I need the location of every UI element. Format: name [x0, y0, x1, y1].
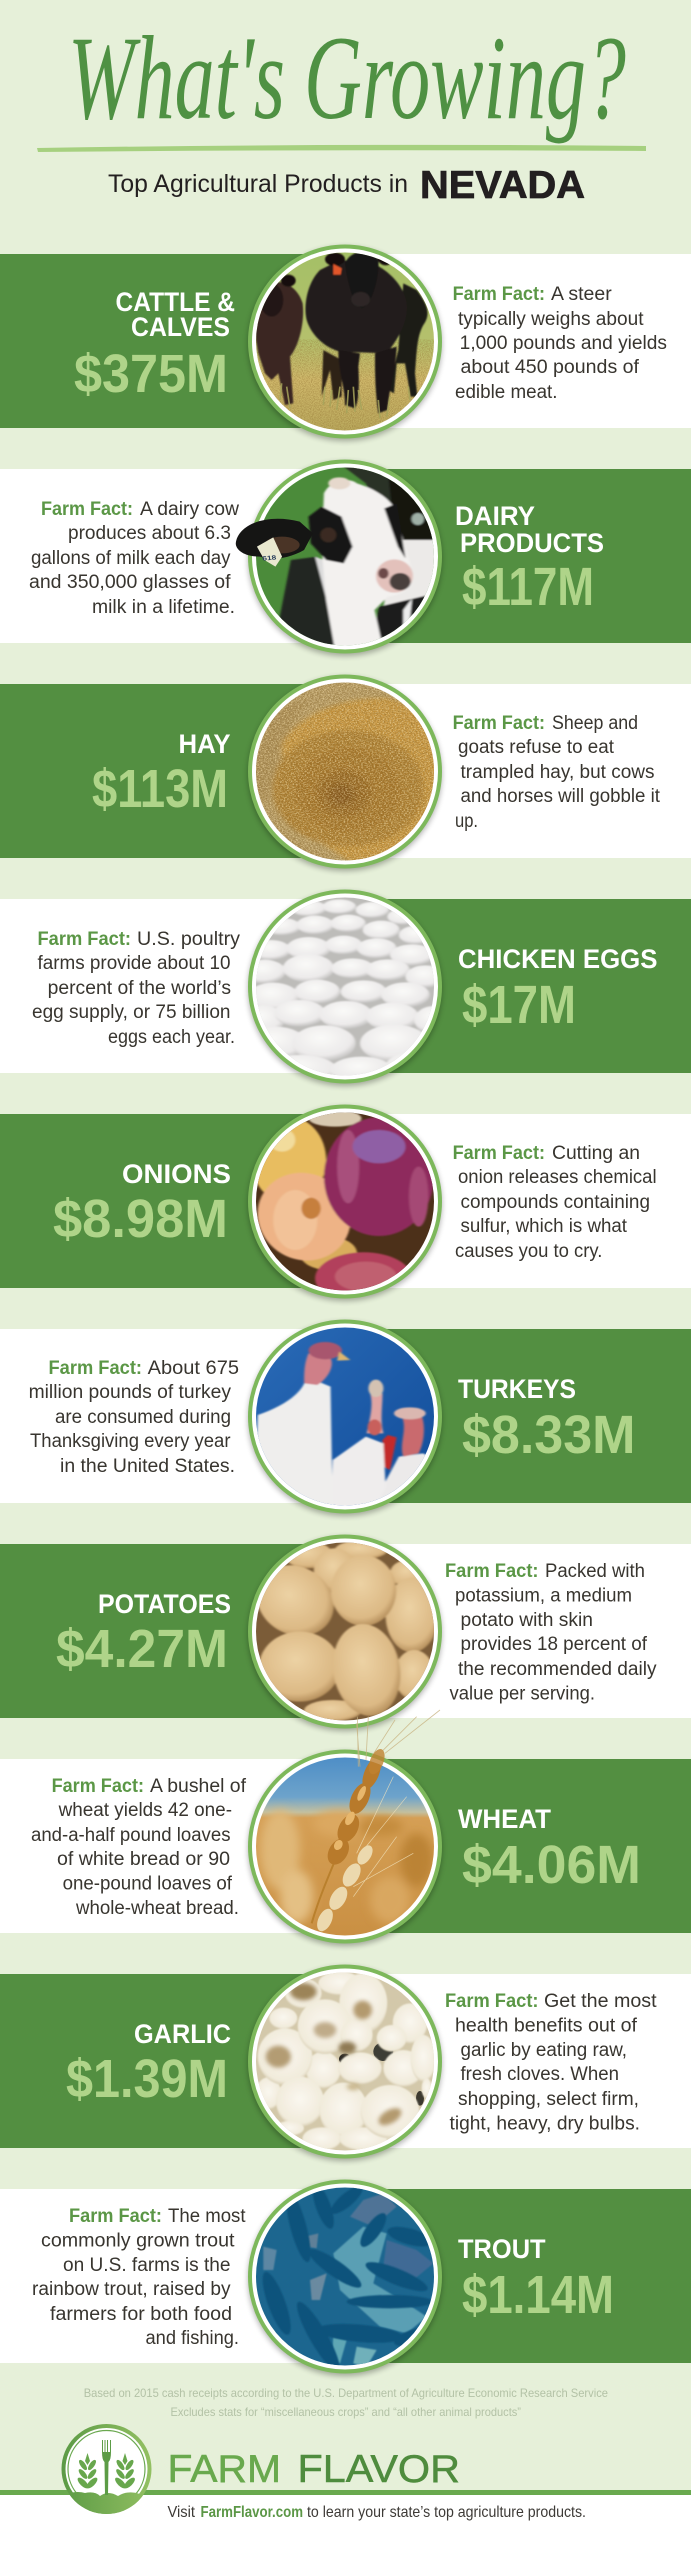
logo wheat stalks: [76, 2453, 137, 2490]
farm fact text: of white bread or 90: [57, 1849, 230, 1870]
farm fact text: [32, 2206, 246, 2349]
farm fact text: rainbow trout, raised by: [32, 2279, 231, 2300]
wordmark: farm flavor: FLAVOR: [298, 2448, 460, 2491]
heading: dairy products: PRODUCTS: [460, 528, 604, 558]
farm fact text: produces about 6.3: [68, 523, 231, 544]
source notes: Based on 2015 cash receipts according to the U.S. Department of Agriculture Economic Research Service: [84, 2386, 608, 2400]
photo: dairy cow: [236, 460, 450, 656]
farm fact text: causes you to cry.: [455, 1241, 602, 1262]
value: $1.14M: $1.14M: [462, 2265, 614, 2325]
farm fact text: and-a-half pound loaves: [31, 1825, 230, 1846]
farm fact text: [453, 713, 661, 832]
photo: onions: [247, 1103, 450, 1304]
farm fact text: eggs each year.: [108, 1027, 235, 1048]
farm fact text: Farm Fact:: [48, 1358, 142, 1379]
farm fact text: [29, 499, 239, 618]
heading: wheat: WHEAT: [458, 1804, 551, 1834]
farm fact text: million pounds of turkey: [29, 1382, 231, 1403]
panel: potatoes: [0, 1533, 691, 1731]
farm fact text: farms provide about 10: [38, 953, 230, 974]
heading: potatoes: POTATOES: [98, 1589, 231, 1619]
farm fact text: Farm Fact:: [445, 1991, 538, 2012]
farm fact text: [31, 1776, 247, 1919]
farm fact text: Farm Fact:: [52, 1776, 144, 1797]
photo: garlic: [248, 1964, 442, 2161]
farm fact text: potato with skin: [460, 1610, 593, 1631]
farm fact text: and horses will gobble it: [460, 786, 661, 807]
value: $375M: $375M: [74, 344, 228, 404]
panel: hay: [0, 673, 691, 871]
farm fact text: are consumed during: [55, 1407, 231, 1428]
farm fact text: wheat yields 42 one-: [58, 1800, 232, 1821]
logo fork: [102, 2440, 111, 2495]
farm fact text: edible meat.: [455, 382, 558, 403]
heading: garlic: GARLIC: [134, 2019, 231, 2049]
farm fact text: in the United States.: [60, 1456, 235, 1477]
subtitle: [108, 164, 585, 207]
farm fact text: sulfur, which is what: [460, 1216, 628, 1237]
call to action: [168, 2504, 586, 2521]
farm fact text: on U.S. farms is the: [63, 2255, 230, 2276]
farm fact text: trampled hay, but cows: [460, 762, 654, 783]
farm fact text: Farm Fact:: [453, 713, 545, 734]
photo: turkeys: [247, 1320, 450, 1517]
farm fact text: potassium, a medium: [455, 1586, 632, 1606]
title: What's: [68, 11, 285, 144]
farm fact text: Cutting an: [552, 1143, 640, 1164]
farm fact text: milk in a lifetime.: [92, 597, 235, 618]
farm fact text: [453, 1143, 657, 1262]
farm fact text: commonly grown trout: [41, 2230, 235, 2252]
panel: onions: [0, 1103, 691, 1304]
photo: cattle: [248, 244, 442, 441]
farm fact text: fresh cloves. When: [460, 2064, 619, 2085]
farm fact text: provides 18 percent of: [460, 1634, 648, 1655]
photo: hay bale: [247, 673, 450, 871]
farm fact text: Farm Fact:: [38, 929, 131, 950]
farm fact text: health benefits out of: [455, 2016, 638, 2036]
farm fact text: A bushel of: [150, 1776, 247, 1797]
header: [37, 11, 646, 207]
farm fact text: Farm Fact:: [69, 2206, 162, 2227]
call to action: Visit: [168, 2504, 196, 2521]
subtitle: Top Agricultural Products in: [108, 170, 408, 198]
value: $1.39M: $1.39M: [66, 2049, 228, 2109]
footer: [0, 2424, 691, 2560]
heading: turkeys: TURKEYS: [458, 1374, 576, 1404]
farm fact text: gallons of milk each day: [31, 548, 231, 569]
heading: onions: ONIONS: [122, 1159, 231, 1189]
farm fact text: Thanksgiving every year: [30, 1431, 231, 1452]
heading: dairy products: DAIRY: [455, 501, 535, 531]
farm fact text: [29, 1358, 239, 1477]
farm fact text: A steer: [551, 284, 612, 305]
farm fact text: onion releases chemical: [458, 1167, 657, 1188]
farm fact text: Farm Fact:: [453, 1143, 545, 1164]
farm fact text: [445, 1561, 657, 1704]
heading: trout: TROUT: [458, 2234, 546, 2264]
farm fact text: about 450 pounds of: [460, 357, 640, 378]
source notes: Excludes stats for “miscellaneous crops” and “all other animal products”: [170, 2405, 521, 2419]
wheat awns: [357, 1710, 440, 1777]
wordmark: farm flavor: [168, 2448, 460, 2491]
heading: cattle and calves: CATTLE &: [116, 287, 235, 317]
panel: chicken eggs: [0, 890, 691, 1086]
panel: wheat: [0, 1710, 691, 1946]
farm fact text: typically weighs about: [458, 309, 644, 330]
call to action: to learn your state’s top agriculture products.: [307, 2504, 586, 2521]
farm fact text: Farm Fact:: [445, 1561, 538, 1582]
heading: cattle and calves: CALVES: [131, 312, 230, 342]
farm fact text: compounds containing: [460, 1192, 650, 1213]
photo: eggs: [240, 890, 454, 1086]
farm fact text: percent of the world’s: [48, 978, 231, 999]
farm fact text: Farm Fact:: [453, 284, 545, 305]
farm fact text: garlic by eating raw,: [460, 2040, 627, 2061]
wordmark: farm flavor: FARM: [168, 2448, 281, 2491]
farm fact text: one-pound loaves of: [63, 1874, 233, 1894]
farm fact text: Packed with: [545, 1561, 645, 1582]
value: $4.06M: $4.06M: [462, 1835, 641, 1895]
panel: turkeys: [0, 1320, 691, 1517]
value: $113M: $113M: [92, 759, 228, 819]
panel: cattle and calves: [0, 244, 691, 441]
value: $8.98M: $8.98M: [53, 1189, 228, 1249]
farm fact text: 1,000 pounds and yields: [460, 333, 667, 354]
farm fact text: shopping, select firm,: [458, 2089, 639, 2110]
farm fact text: and fishing.: [146, 2328, 239, 2349]
title: [68, 11, 626, 144]
farm fact text: A dairy cow: [140, 499, 239, 520]
farm fact text: [453, 284, 667, 403]
heading: cattle and calves: [116, 287, 235, 342]
title underline stroke: [37, 145, 646, 152]
heading: chicken eggs: CHICKEN EGGS: [458, 944, 658, 974]
farm fact text: and 350,000 glasses of: [29, 572, 231, 593]
panel: garlic: [0, 1964, 691, 2161]
photo: trout: [248, 2180, 442, 2376]
farm fact text: Farm Fact:: [41, 499, 133, 520]
photo: wheat: [248, 1710, 442, 1946]
cow ear with tag: [236, 519, 313, 567]
subtitle: NEVADA: [420, 164, 585, 207]
farm fact text: up.: [455, 811, 478, 832]
farm fact text: The most: [168, 2206, 246, 2227]
panel: trout: [0, 2180, 691, 2376]
heading: dairy products: [455, 501, 604, 558]
source notes: [84, 2386, 608, 2419]
value: $8.33M: $8.33M: [462, 1405, 636, 1465]
farm fact text: Sheep and: [552, 713, 638, 734]
farm fact text: tight, heavy, dry bulbs.: [450, 2114, 640, 2134]
farm fact text: farmers for both food: [50, 2304, 232, 2325]
farm fact text: whole-wheat bread.: [75, 1898, 239, 1919]
farm fact text: [445, 1991, 657, 2134]
value: $117M: $117M: [462, 557, 594, 617]
farm fact text: About 675: [148, 1358, 239, 1379]
farm fact text: goats refuse to eat: [458, 737, 615, 758]
farm fact text: U.S. poultry: [137, 929, 241, 950]
farm fact text: egg supply, or 75 billion: [32, 1002, 230, 1023]
cow ear with tag: 618: [262, 554, 277, 562]
heading: hay: HAY: [178, 729, 231, 759]
value: $17M: $17M: [462, 975, 576, 1035]
farm fact text: value per serving.: [450, 1684, 595, 1704]
farm fact text: [32, 929, 241, 1048]
farm fact text: Get the most: [544, 1991, 657, 2012]
call to action: FarmFlavor.com: [200, 2504, 303, 2521]
farm fact text: the recommended daily: [458, 1659, 657, 1680]
logo: farm flavor emblem: [62, 2424, 152, 2514]
value: $4.27M: $4.27M: [56, 1619, 228, 1679]
panel: dairy products: [0, 460, 691, 656]
photo: potatoes: [245, 1533, 450, 1731]
